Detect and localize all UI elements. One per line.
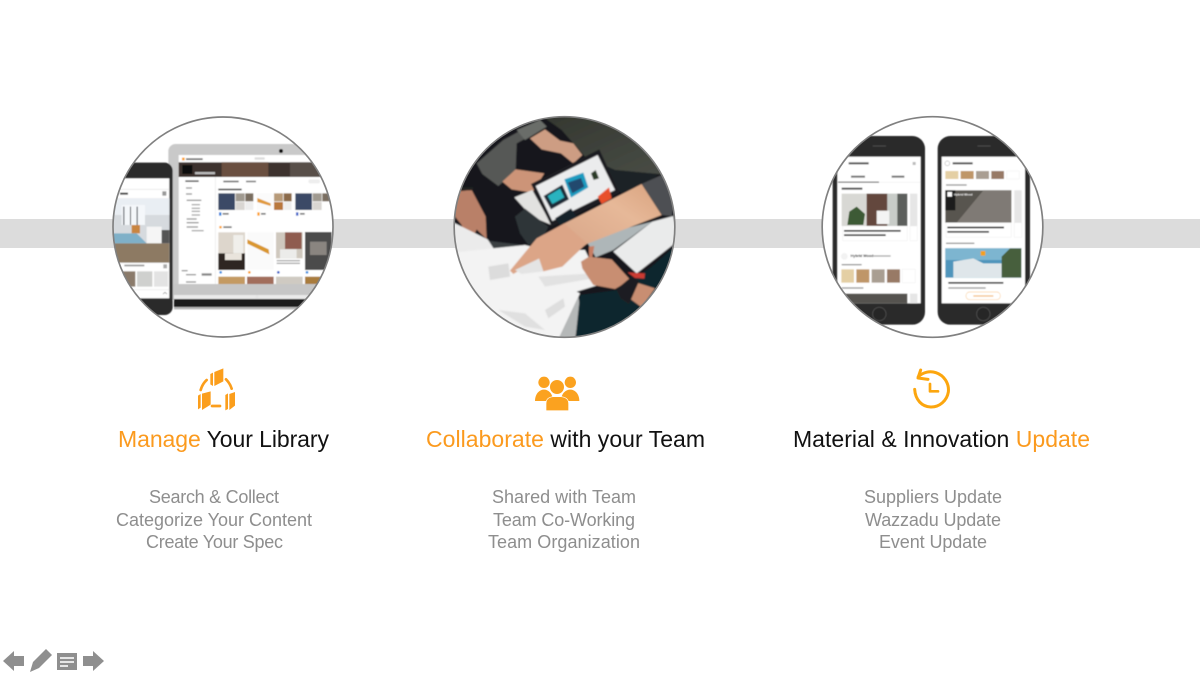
- heading: Material and Innovation Update: Material & Innovation Update: [793, 426, 1090, 452]
- icon: notes: [57, 653, 77, 670]
- horizontal band: [0, 219, 1200, 248]
- left phone: [833, 136, 925, 325]
- icon: pencil: [30, 649, 52, 672]
- background paper and table: [514, 190, 552, 225]
- text block: update features: [864, 487, 1002, 552]
- sweater sleeve: [476, 132, 524, 186]
- text block: library features: Categorize Your Content: [116, 510, 312, 530]
- icon: library cycle of books: [198, 368, 235, 410]
- text block: team features: Shared with Team: [492, 487, 636, 507]
- text block: library features: Search & Collect: [149, 487, 279, 507]
- text block: team features: [488, 487, 640, 552]
- icon: team of people: [535, 377, 579, 411]
- laptop: [168, 144, 332, 310]
- text block: team features: Team Organization: [488, 532, 640, 552]
- icon: history clock: [915, 370, 948, 407]
- panel: library devices circle: [112, 116, 334, 338]
- toolbar: slide navigation: [3, 649, 104, 672]
- right phone: Hybrid Wood: [954, 192, 973, 196]
- laptop: [530, 150, 607, 226]
- photo background: [455, 119, 674, 301]
- panel: team photo circle: [453, 116, 676, 338]
- left phone: Hybrid Wood: [851, 254, 873, 258]
- text block: update features: Event Update: [879, 532, 987, 552]
- phone: [114, 162, 174, 316]
- holding hand: [581, 257, 630, 289]
- heading: Manage Your Library: Manage Your Library: [118, 426, 330, 452]
- text block: library features: Create Your Spec: [146, 532, 283, 552]
- heading: Collaborate with your Team: Collaborate with your Team: [426, 426, 705, 452]
- text block: team features: Team Co-Working: [493, 510, 635, 530]
- main arm: [563, 184, 662, 252]
- forearms: [530, 129, 582, 163]
- text block: update features: Suppliers Update: [864, 487, 1002, 507]
- text block: update features: Wazzadu Update: [865, 510, 1001, 530]
- icon: forward arrow: [83, 651, 104, 671]
- keyboard and palm rest: [585, 222, 652, 257]
- pointing hand: [510, 223, 587, 274]
- panel: mobile app circle: [822, 117, 1043, 337]
- text block: library features: [116, 487, 312, 552]
- left hand: [455, 190, 487, 242]
- left edge paper and main sheet: [455, 222, 494, 253]
- icon: back arrow: [3, 651, 24, 671]
- dark table lower right: [576, 250, 672, 336]
- right phone: [938, 136, 1030, 325]
